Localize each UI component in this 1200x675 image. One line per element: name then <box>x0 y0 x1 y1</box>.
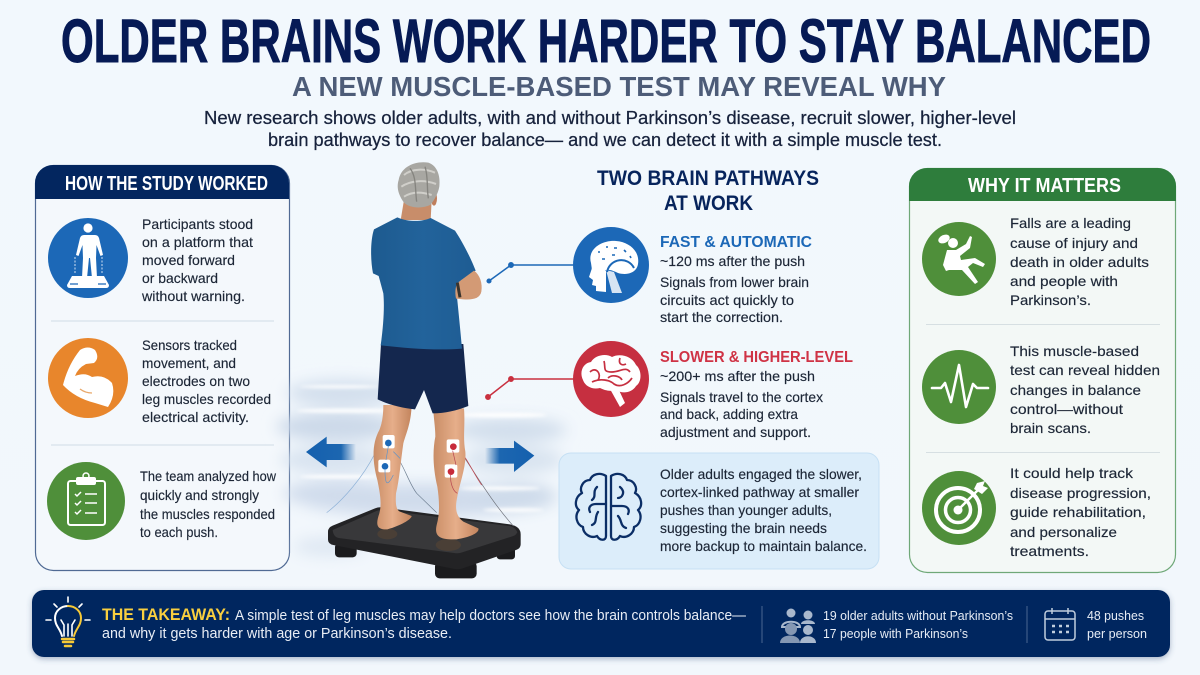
connector: slow pathway <box>486 377 575 399</box>
text: fast and automatic <box>660 234 812 325</box>
text: step 2: electrical activity. <box>142 409 249 425</box>
text: step 1: Participants stood <box>142 216 253 232</box>
text: why 2: test can reveal hidden <box>1010 362 1160 378</box>
panel: how the study worked <box>35 165 290 570</box>
text: slower and higher-level: adjustment and support. <box>660 424 811 440</box>
hair <box>398 162 440 207</box>
text: why 1: death in older adults <box>1010 254 1149 270</box>
shirt <box>371 217 476 349</box>
intro text: New research shows older adults, with and without Parkinson’s disease, recruit slower, higher-level <box>204 108 1016 128</box>
text: pushes: per person <box>1087 626 1147 641</box>
text: why 2: brain scans. <box>1010 420 1091 436</box>
heading: two brain pathways: AT WORK <box>664 192 753 215</box>
heading: two brain pathways <box>597 167 819 215</box>
neck and ear <box>401 191 437 220</box>
takeaway bar <box>32 590 1170 657</box>
text: why 3: disease progression, <box>1010 485 1151 501</box>
text: why 3: guide rehabilitation, <box>1010 504 1146 520</box>
text: fast and automatic: ~120 ms after the push <box>660 253 805 269</box>
panel: why it matters <box>909 168 1176 572</box>
callout text: pushes than younger adults, <box>660 502 832 518</box>
text: why 1: Parkinson’s. <box>1010 292 1091 308</box>
takeaway text <box>102 606 746 642</box>
text: step 3 <box>140 468 277 540</box>
text: step 1: or backward <box>142 270 218 286</box>
text: step 2: movement, and <box>142 355 236 371</box>
text: fast and automatic: circuits act quickly to <box>660 292 794 308</box>
text: step 1: moved forward <box>142 252 235 268</box>
text: why 1: and people with <box>1010 273 1118 289</box>
text: why 3 <box>1010 465 1151 559</box>
text: participants <box>823 608 1013 641</box>
text: step 3: the muscles responded <box>140 506 275 522</box>
intro text: brain pathways to recover balance— and we can detect it with a simple muscle test. <box>268 130 942 150</box>
callout text: cortex-linked pathway at smaller <box>660 484 859 500</box>
arrow: forward <box>485 441 534 472</box>
text: why 3: It could help track <box>1010 465 1134 481</box>
icon: pulse line <box>922 350 996 424</box>
icon: brain outline <box>576 474 641 540</box>
icon: falling person <box>922 222 996 296</box>
panel header <box>909 168 1176 201</box>
shorts <box>378 344 468 413</box>
legs <box>374 405 479 539</box>
text: fast and automatic: Signals from lower brain <box>660 274 809 290</box>
text: why 1 <box>1010 215 1149 308</box>
text: participants: 19 older adults without Parkinson’s <box>823 608 1013 623</box>
icon: flexed arm <box>48 338 128 418</box>
motion waves <box>277 380 567 557</box>
text: fast and automatic: start the correction. <box>660 309 783 325</box>
text: step 1: without warning. <box>141 288 245 304</box>
panel header: HOW THE STUDY WORKED <box>65 173 268 195</box>
forearm <box>455 271 482 299</box>
electrodes <box>378 435 459 493</box>
text: step 1: on a platform that <box>142 234 253 250</box>
panel header: WHY IT MATTERS <box>968 175 1121 197</box>
wires <box>327 449 513 526</box>
icon: brain, red <box>573 341 649 417</box>
text: pushes: 48 pushes <box>1087 608 1144 623</box>
text: slower and higher-level: SLOWER & HIGHER-LEVEL <box>660 349 853 366</box>
icon: person on platform <box>48 218 128 298</box>
intro text <box>204 108 1016 150</box>
text: why 2: This muscle-based <box>1010 343 1139 359</box>
text: why 1: Falls are a leading <box>1010 215 1131 231</box>
text: step 2: Sensors tracked <box>142 337 237 353</box>
icon: clipboard checklist <box>47 462 125 540</box>
text: step 1 <box>141 216 253 304</box>
balance platform <box>328 507 521 578</box>
subtitle: A NEW MUSCLE-BASED TEST MAY REVEAL WHY <box>292 71 946 102</box>
text: why 3: and personalize <box>1010 524 1117 540</box>
text: step 2: leg muscles recorded <box>142 391 271 407</box>
text: why 2: changes in balance <box>1010 382 1141 398</box>
text: step 2 <box>142 337 271 425</box>
icon: brain and head, blue <box>573 227 649 303</box>
callout text: suggesting the brain needs <box>660 520 827 536</box>
text: participants: 17 people with Parkinson’s <box>823 626 968 641</box>
text: why 2 <box>1010 343 1160 436</box>
text: step 3: to each push. <box>140 524 218 540</box>
heading: two brain pathways: TWO BRAIN PATHWAYS <box>597 167 819 190</box>
text: slower and higher-level: Signals travel to the cortex <box>660 389 823 405</box>
icon: calendar <box>1045 608 1075 640</box>
panel header <box>35 165 289 199</box>
text: fast and automatic: FAST & AUTOMATIC <box>660 234 812 251</box>
callout text <box>660 466 867 554</box>
icon: target <box>922 471 996 545</box>
text: step 3: The team analyzed how <box>140 468 277 484</box>
callout: older adults <box>559 453 879 569</box>
callout text: more backup to maintain balance. <box>660 538 867 554</box>
icon: light bulb <box>46 597 90 646</box>
icon: participants <box>780 608 816 643</box>
arrow: backward <box>306 437 356 467</box>
callout text: Older adults engaged the slower, <box>660 466 862 482</box>
takeaway text: and why it gets harder with age or Parkinson’s disease. <box>102 625 452 642</box>
text: slower and higher-level: and back, adding extra <box>660 406 798 422</box>
connector: fast pathway <box>487 263 575 283</box>
text: why 1: cause of injury and <box>1010 235 1138 251</box>
text: slower and higher-level: ~200+ ms after the push <box>660 368 815 384</box>
text: why 3: treatments. <box>1010 543 1089 559</box>
text: why 2: control—without <box>1010 401 1123 417</box>
text: slower and higher-level <box>660 349 853 440</box>
text: pushes <box>1087 608 1147 641</box>
text: step 3: quickly and strongly <box>140 487 259 503</box>
takeaway text: THE TAKEAWAY: <box>102 606 230 624</box>
text: step 2: electrodes on two <box>142 373 250 389</box>
takeaway text: A simple test of leg muscles may help doctors see how the brain controls balance— <box>235 607 746 624</box>
figure: older man standing on balance platform <box>277 162 567 578</box>
